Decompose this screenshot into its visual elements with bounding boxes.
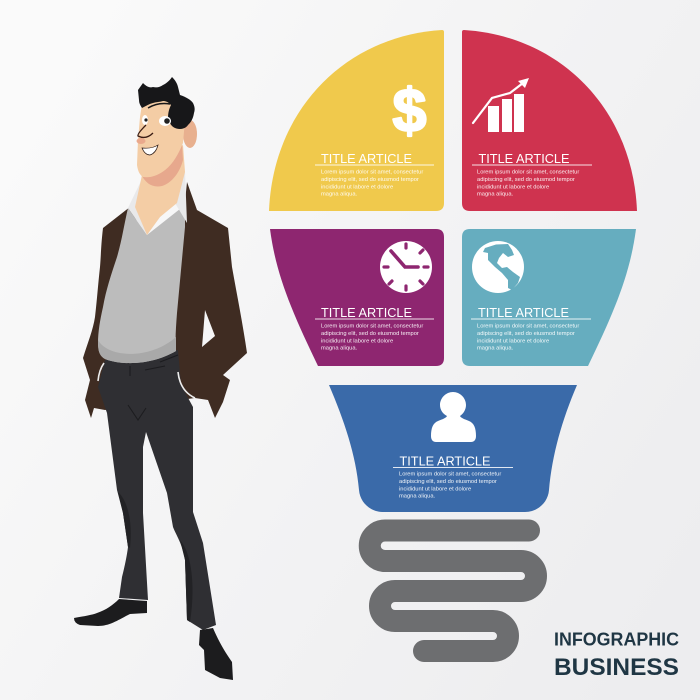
shirt belly shade bbox=[98, 337, 176, 363]
body text: adipiscing elit, sed do eiusmod tempor bbox=[321, 177, 419, 183]
body text: magna aliqua. bbox=[477, 346, 514, 352]
body text: incididunt ut labore et dolore bbox=[399, 486, 471, 492]
panel shape bbox=[462, 30, 637, 211]
icon: globe bbox=[472, 241, 524, 293]
body text: adipiscing elit, sed do eiusmod tempor bbox=[399, 479, 497, 485]
panel: growth (red) bbox=[462, 30, 637, 211]
body text: incididunt ut labore et dolore bbox=[477, 338, 549, 344]
panel: time (purple) bbox=[270, 229, 444, 366]
panel: global (teal) bbox=[462, 229, 636, 366]
panel shape bbox=[462, 229, 636, 366]
panel: people (blue) bbox=[329, 385, 577, 512]
trousers bbox=[98, 350, 216, 630]
eyes bbox=[142, 115, 148, 125]
heading: TITLE ARTICLE bbox=[321, 151, 412, 166]
jaw shadow bbox=[142, 143, 183, 186]
body text: incididunt ut labore et dolore bbox=[321, 338, 393, 344]
body text: incididunt ut labore et dolore bbox=[477, 184, 549, 190]
jacket bbox=[83, 182, 247, 418]
bulb base: coil bbox=[370, 530, 536, 651]
panel shape bbox=[270, 229, 444, 366]
body text: adipiscing elit, sed do eiusmod tempor bbox=[477, 177, 575, 183]
panel shape bbox=[269, 30, 444, 211]
body text: Lorem ipsum dolor sit amet, consectetur bbox=[321, 324, 423, 330]
gap between arm and body bbox=[202, 310, 215, 347]
face bbox=[137, 98, 185, 177]
character: businessman bbox=[74, 77, 247, 680]
heading: TITLE ARTICLE bbox=[321, 305, 412, 320]
icon: dollar sign: $ bbox=[393, 76, 427, 144]
ear bbox=[183, 120, 197, 148]
pocket edges bbox=[98, 363, 195, 398]
body text: magna aliqua. bbox=[321, 346, 358, 352]
heading: TITLE ARTICLE bbox=[400, 454, 490, 468]
body text: magna aliqua. bbox=[399, 494, 436, 500]
eyebrow bbox=[148, 104, 170, 108]
body text: Lorem ipsum dolor sit amet, consectetur bbox=[477, 170, 579, 176]
body text: Lorem ipsum dolor sit amet, consectetur bbox=[477, 324, 579, 330]
hair bbox=[138, 77, 195, 129]
title: infographic business: INFOGRAPHIC bbox=[554, 630, 679, 650]
body text: adipiscing elit, sed do eiusmod tempor bbox=[321, 331, 419, 337]
belt and creases bbox=[128, 355, 178, 420]
panel: finance (yellow) bbox=[269, 30, 444, 211]
icon: clock bbox=[380, 241, 432, 293]
panel shape bbox=[329, 385, 577, 512]
smile bbox=[142, 145, 158, 155]
right shoe bbox=[199, 628, 233, 680]
title: infographic business: BUSINESS bbox=[554, 654, 679, 681]
body text: magna aliqua. bbox=[321, 192, 358, 198]
icon: rising bar chart bbox=[473, 78, 529, 132]
heading: TITLE ARTICLE bbox=[478, 305, 569, 320]
body text: magna aliqua. bbox=[477, 192, 514, 198]
collar bbox=[128, 172, 187, 235]
body text: adipiscing elit, sed do eiusmod tempor bbox=[477, 331, 575, 337]
body text: Lorem ipsum dolor sit amet, consectetur bbox=[321, 170, 423, 176]
trouser shading bbox=[118, 492, 193, 622]
heading: TITLE ARTICLE bbox=[478, 151, 570, 166]
shirt bbox=[98, 205, 185, 363]
nose bbox=[138, 125, 153, 137]
icon: person bbox=[431, 392, 476, 442]
body text: Lorem ipsum dolor sit amet, consectetur bbox=[399, 472, 501, 478]
body text: incididunt ut labore et dolore bbox=[321, 184, 393, 190]
cheek blush bbox=[136, 138, 146, 144]
title: infographic business bbox=[554, 630, 679, 681]
left shoe bbox=[74, 599, 147, 626]
neck bbox=[135, 145, 185, 235]
